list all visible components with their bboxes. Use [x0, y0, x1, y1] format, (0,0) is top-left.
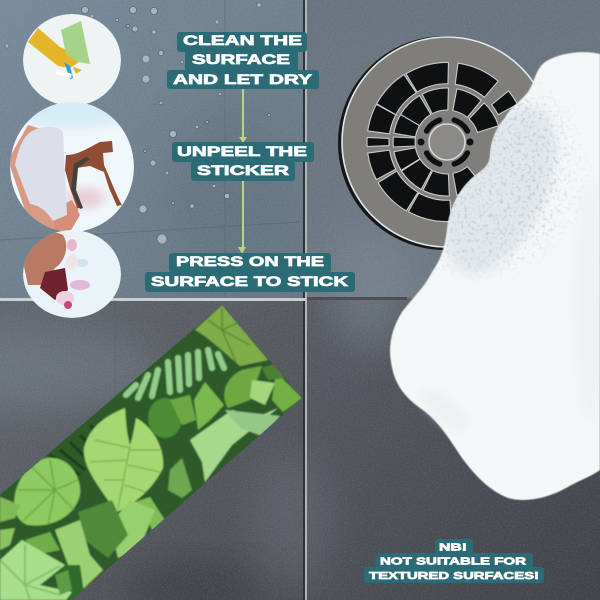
warning note: not suitable for textured surfaces: [364, 539, 544, 583]
warning note: not suitable for textured surfaces: NB!: [439, 542, 467, 554]
dark fern strip: [49, 419, 102, 476]
step label: clean the surface and let dry: AND LET DRY: [173, 71, 313, 87]
water droplets: [5, 3, 270, 244]
step label: press on the surface to stick: PRESS ON THE: [176, 253, 324, 269]
fern frond: [126, 350, 224, 398]
leaf: lower cluster: [135, 496, 165, 530]
hand: [8, 125, 80, 232]
leaf: large heart: [84, 408, 163, 512]
flower sticker: [67, 239, 77, 251]
step label: press on the surface to stick: SURFACE TO STICK: [151, 273, 348, 289]
icon: floor drain: [338, 36, 552, 250]
photo circle: unpeel the sticker: [8, 96, 134, 232]
photo circle: clean the surface: [23, 14, 121, 106]
cleaning bits: [64, 62, 73, 79]
soap foam: [389, 52, 600, 501]
step label: unpeel the sticker: [172, 142, 314, 181]
leaf: round lily: [14, 458, 80, 526]
step label: unpeel the sticker: UNPEEL THE: [177, 143, 307, 159]
step label: clean the surface and let dry: CLEAN THE: [183, 32, 302, 48]
arrow: clean to unpeel: [239, 89, 247, 143]
photo circle: press on the surface: [23, 230, 121, 318]
leaf sticker strip: [0, 300, 310, 600]
thumb: [23, 233, 66, 285]
deer: [65, 141, 122, 208]
step label: clean the surface and let dry: SURFACE: [192, 51, 290, 67]
arrow: unpeel to press: [238, 180, 246, 254]
peeled backing: [15, 127, 67, 221]
step label: press on the surface to stick: [145, 253, 355, 292]
glove: [28, 28, 80, 68]
step label: clean the surface and let dry: [167, 32, 319, 89]
leaf: right cluster: [224, 366, 262, 408]
leaf: middle clusters: [148, 398, 182, 438]
sponge: [61, 21, 90, 64]
warning note: not suitable for textured surfaces: NOT SUITABLE FOR: [380, 556, 527, 568]
leaf: bottom-left: [0, 540, 72, 600]
step label: unpeel the sticker: STICKER: [197, 162, 289, 178]
leaf: top corner: [195, 305, 268, 366]
warning note: not suitable for textured surfaces: TEXTURED SURFACES!: [369, 570, 539, 582]
